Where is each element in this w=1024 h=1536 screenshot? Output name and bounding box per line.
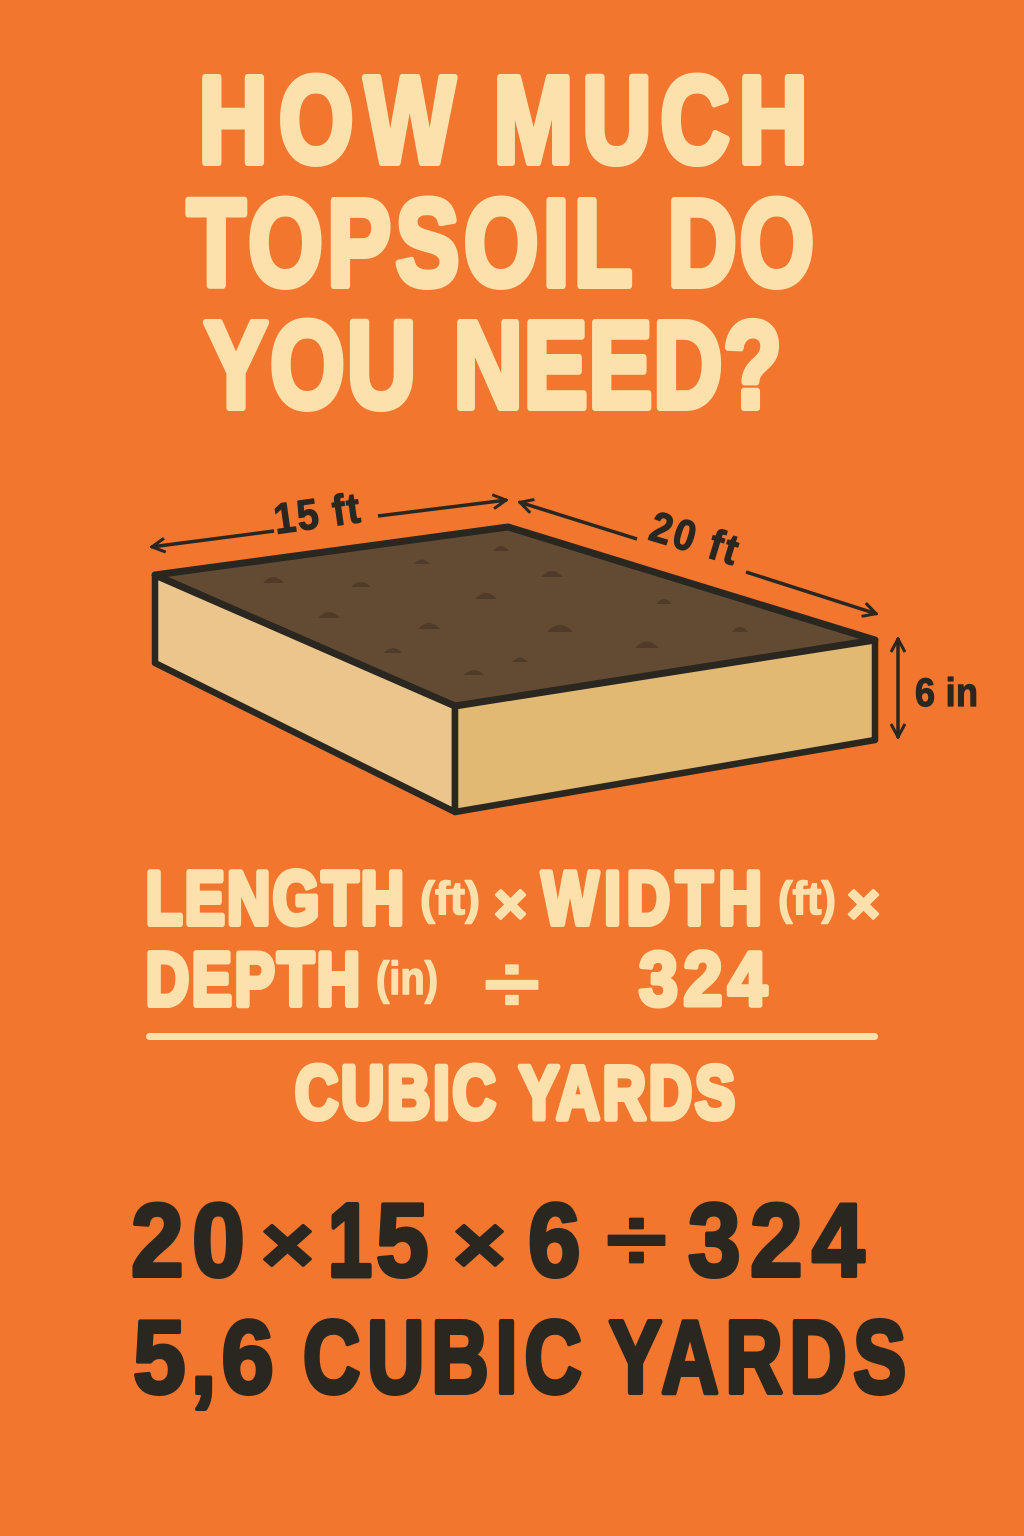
dimension: 20 ft — [519, 502, 877, 614]
formula line 2 — [146, 937, 767, 1029]
formula line 1: WIDTH — [542, 858, 762, 941]
top soil face — [155, 527, 875, 706]
calculation — [131, 1181, 865, 1299]
right face — [455, 640, 875, 812]
formula line 1: × — [847, 872, 880, 935]
worked example — [131, 1181, 906, 1416]
result — [133, 1300, 906, 1416]
formula line 1: (ft) — [420, 872, 480, 924]
result: YARDS — [609, 1301, 906, 1415]
dimension: 15 ft — [151, 483, 507, 547]
calculation: ÷ — [606, 1190, 667, 1289]
result: CUBIC — [303, 1301, 582, 1415]
formula line 1: LENGTH — [146, 858, 404, 941]
left face — [155, 575, 455, 812]
title — [187, 52, 814, 434]
formula line 1 — [146, 858, 880, 941]
formula result label — [295, 1052, 735, 1135]
calculation: 6 — [528, 1183, 581, 1299]
result: 5,6 — [133, 1300, 274, 1416]
formula line 2: (in) — [376, 952, 438, 1004]
dimension: 6 in: 6 in — [915, 671, 978, 715]
formula — [146, 858, 880, 1135]
calculation: × — [261, 1200, 314, 1289]
dimension: 20 ft: 20 ft — [644, 502, 745, 574]
title: NEED? — [454, 297, 782, 434]
title: DO — [668, 175, 814, 312]
dimension: 6 in — [898, 638, 978, 738]
dimension: 15 ft: 15 ft — [271, 483, 363, 543]
calculation: 1 — [328, 1181, 372, 1299]
formula line 2: ÷ — [484, 941, 540, 1029]
title: TOPSOIL — [187, 175, 632, 312]
diagram: topsoil slab — [155, 527, 875, 812]
formula line 1: (ft) — [778, 872, 836, 924]
title: HOW — [198, 52, 455, 189]
formula line 2: DEPTH — [146, 939, 360, 1022]
formula result label: YARDS — [519, 1052, 735, 1135]
formula line 2: 324 — [639, 937, 767, 1022]
fraction bar — [146, 1033, 878, 1040]
formula result label: CUBIC — [295, 1052, 496, 1135]
title: YOU — [204, 297, 416, 434]
calculation: 5 — [376, 1183, 429, 1299]
calculation: 324 — [688, 1183, 865, 1299]
calculation: 20 — [131, 1183, 245, 1299]
title: MUCH — [494, 52, 808, 189]
calculation: × — [453, 1200, 506, 1289]
formula line 1: × — [494, 872, 527, 935]
soil specks — [263, 546, 748, 675]
